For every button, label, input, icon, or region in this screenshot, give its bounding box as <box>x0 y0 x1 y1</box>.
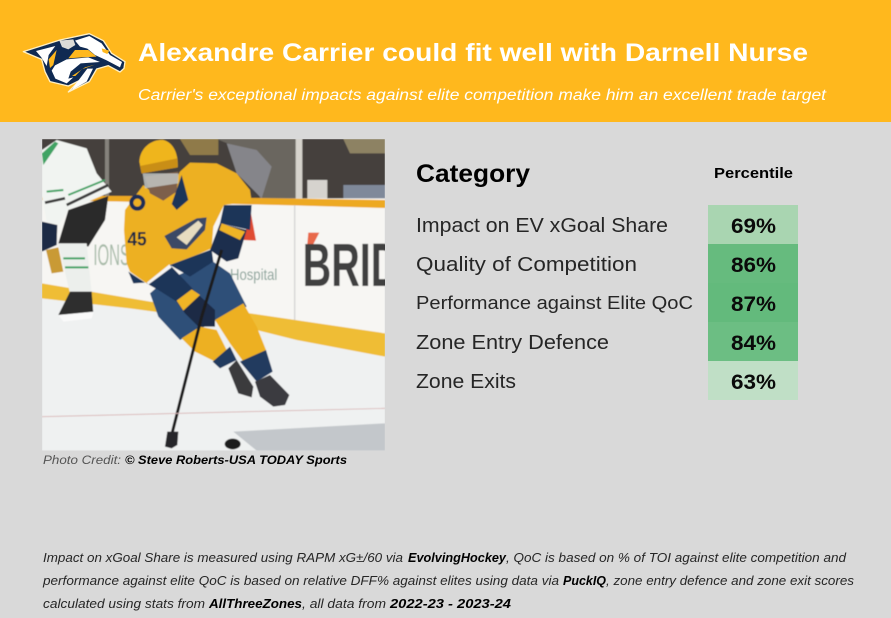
row: Quality of Competition: 86% <box>731 254 776 277</box>
row: Zone Entry Defence <box>416 322 798 361</box>
row: Zone Exits <box>416 361 798 400</box>
title: Alexandre Carrier could fit well with Darnell Nurse <box>138 39 808 67</box>
photo credit: © Steve Roberts-USA TODAY Sports <box>125 455 347 467</box>
percentile heading: Percentile <box>714 165 793 182</box>
subtitle: Carrier's exceptional impacts against elite competition make him an excellent trade target <box>138 87 827 104</box>
footnote: , zone entry defence and zone exit scores <box>606 573 855 588</box>
head and helmet <box>145 172 178 201</box>
row: Zone Exits: Zone Exits <box>416 371 516 393</box>
row: Performance against Elite QoC: 87% <box>731 293 776 316</box>
photo: hockey player skating with puck: BRID <box>303 231 399 300</box>
footnote: , QoC is based on % of TOI against elite competition and <box>506 550 847 565</box>
row: Performance against Elite QoC <box>416 283 798 322</box>
table: category percentiles <box>416 160 798 400</box>
crowd and glass <box>42 139 385 201</box>
row: Impact on EV xGoal Share: 69% <box>731 215 776 238</box>
row: Impact on EV xGoal Share: Impact on EV xGoal Share <box>416 215 668 237</box>
yellow kick plate <box>42 283 385 357</box>
footnote: Impact on xGoal Share is measured using RAPM xG±/60 via <box>43 550 403 565</box>
photo: hockey player skating with puck: Hospital <box>230 267 277 284</box>
footnote: , all data from <box>302 596 386 611</box>
row: Quality of Competition <box>416 244 798 283</box>
puck <box>225 439 241 449</box>
row: Impact on EV xGoal Share <box>416 205 798 244</box>
row: Zone Entry Defence: Zone Entry Defence <box>416 332 609 354</box>
category heading: Category <box>416 160 530 188</box>
footnote: AllThreeZones <box>208 596 302 611</box>
row: Quality of Competition: Quality of Competition <box>416 254 637 276</box>
photo: hockey player skating with puck: 45 <box>127 229 147 250</box>
skates <box>228 360 253 397</box>
footnote: 2022-23 - 2023-24 <box>389 596 512 611</box>
row: Performance against Elite QoC: Performance against Elite QoC <box>416 292 693 313</box>
row: Zone Entry Defence: 84% <box>731 332 776 355</box>
footnote: performance against elite QoC is based on relative DFF% against elites using data via <box>42 573 559 588</box>
player pants <box>150 261 247 340</box>
footnote <box>42 550 855 611</box>
hockey stick <box>172 250 222 435</box>
ice markings <box>233 423 385 451</box>
opposing player in background <box>42 139 112 202</box>
dasher boards <box>42 198 385 202</box>
header banner <box>0 0 891 122</box>
photo: hockey player skating with puck <box>42 139 399 451</box>
shoulder patch and number <box>129 195 145 211</box>
icon: Nashville Predators logo <box>23 34 125 92</box>
photo: hockey player skating with puck: IONS <box>93 239 130 272</box>
jersey <box>124 163 252 283</box>
jersey crest <box>164 217 207 249</box>
footnote: calculated using stats from <box>43 596 205 611</box>
footnote: EvolvingHockey <box>408 550 507 565</box>
row: Zone Exits: 63% <box>731 371 776 394</box>
board advertising <box>306 232 320 245</box>
legs <box>215 303 266 362</box>
footnote: PuckIQ <box>563 573 606 588</box>
photo credit: Photo Credit: <box>43 455 121 467</box>
sleeve and glove <box>220 205 252 230</box>
photo credit <box>43 455 347 467</box>
